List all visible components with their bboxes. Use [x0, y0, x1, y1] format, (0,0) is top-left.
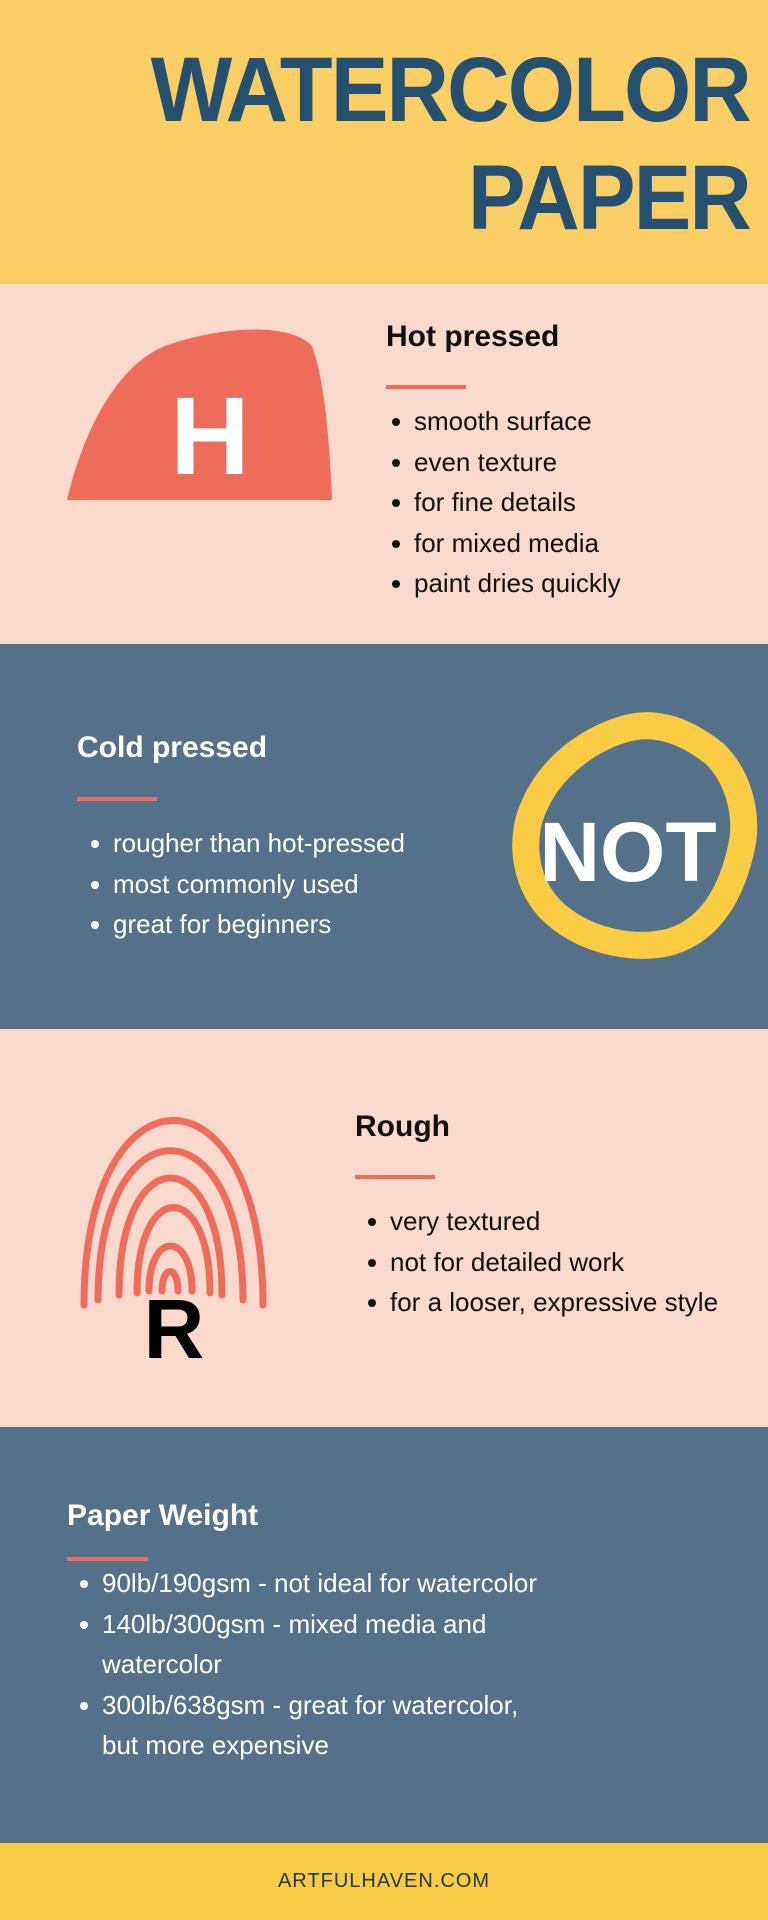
- icon: H blob: [67, 330, 332, 500]
- list: hot pressed: paint dries quickly: [414, 568, 621, 598]
- icon: rainbow R: [80, 1117, 266, 1376]
- heading: rough: Rough: [355, 1110, 450, 1143]
- header: [0, 0, 768, 284]
- list: cold pressed: great for beginners: [113, 909, 331, 939]
- title: [150, 39, 750, 249]
- heading: paper weight: Paper Weight: [67, 1499, 258, 1532]
- list: rough: not for detailed work: [390, 1246, 624, 1276]
- list: rough: [368, 1206, 718, 1317]
- list: paper weight: watercolor: [102, 1649, 222, 1679]
- list: hot pressed: even texture: [414, 446, 557, 476]
- list: rough: for a looser, expressive style: [390, 1287, 718, 1317]
- footer: ARTFULHAVEN.COM: [278, 1870, 490, 1892]
- list: cold pressed: most commonly used: [113, 868, 359, 898]
- list: paper weight: 90lb/190gsm - not ideal for watercolor: [102, 1568, 537, 1598]
- list: paper weight: 300lb/638gsm - great for watercolor,: [102, 1690, 518, 1720]
- panel: cold pressed: [0, 644, 768, 1029]
- panel: paper weight: [0, 1427, 768, 1843]
- icon: NOT circle: [512, 712, 758, 959]
- icon: H blob: H: [170, 375, 250, 498]
- list: hot pressed: for fine details: [414, 487, 576, 517]
- heading: hot pressed: Hot pressed: [386, 320, 559, 353]
- heading: cold pressed: Cold pressed: [77, 731, 267, 764]
- panel: rough: [0, 1029, 768, 1427]
- list: paper weight: 140lb/300gsm - mixed media and: [102, 1608, 486, 1638]
- list: cold pressed: [91, 828, 405, 939]
- panel: hot pressed: [0, 284, 768, 644]
- list: hot pressed: [392, 406, 621, 598]
- title: PAPER: [468, 147, 750, 249]
- footer: [0, 1843, 768, 1920]
- icon: rainbow R: R: [144, 1282, 204, 1376]
- list: cold pressed: rougher than hot-pressed: [113, 828, 405, 858]
- list: rough: very textured: [390, 1206, 540, 1236]
- list: hot pressed: smooth surface: [414, 406, 592, 436]
- list: paper weight: [80, 1568, 537, 1760]
- title: WATERCOLOR: [151, 39, 750, 141]
- list: hot pressed: for mixed media: [414, 528, 599, 558]
- icon: NOT circle: NOT: [539, 805, 717, 899]
- list: paper weight: but more expensive: [102, 1730, 329, 1760]
